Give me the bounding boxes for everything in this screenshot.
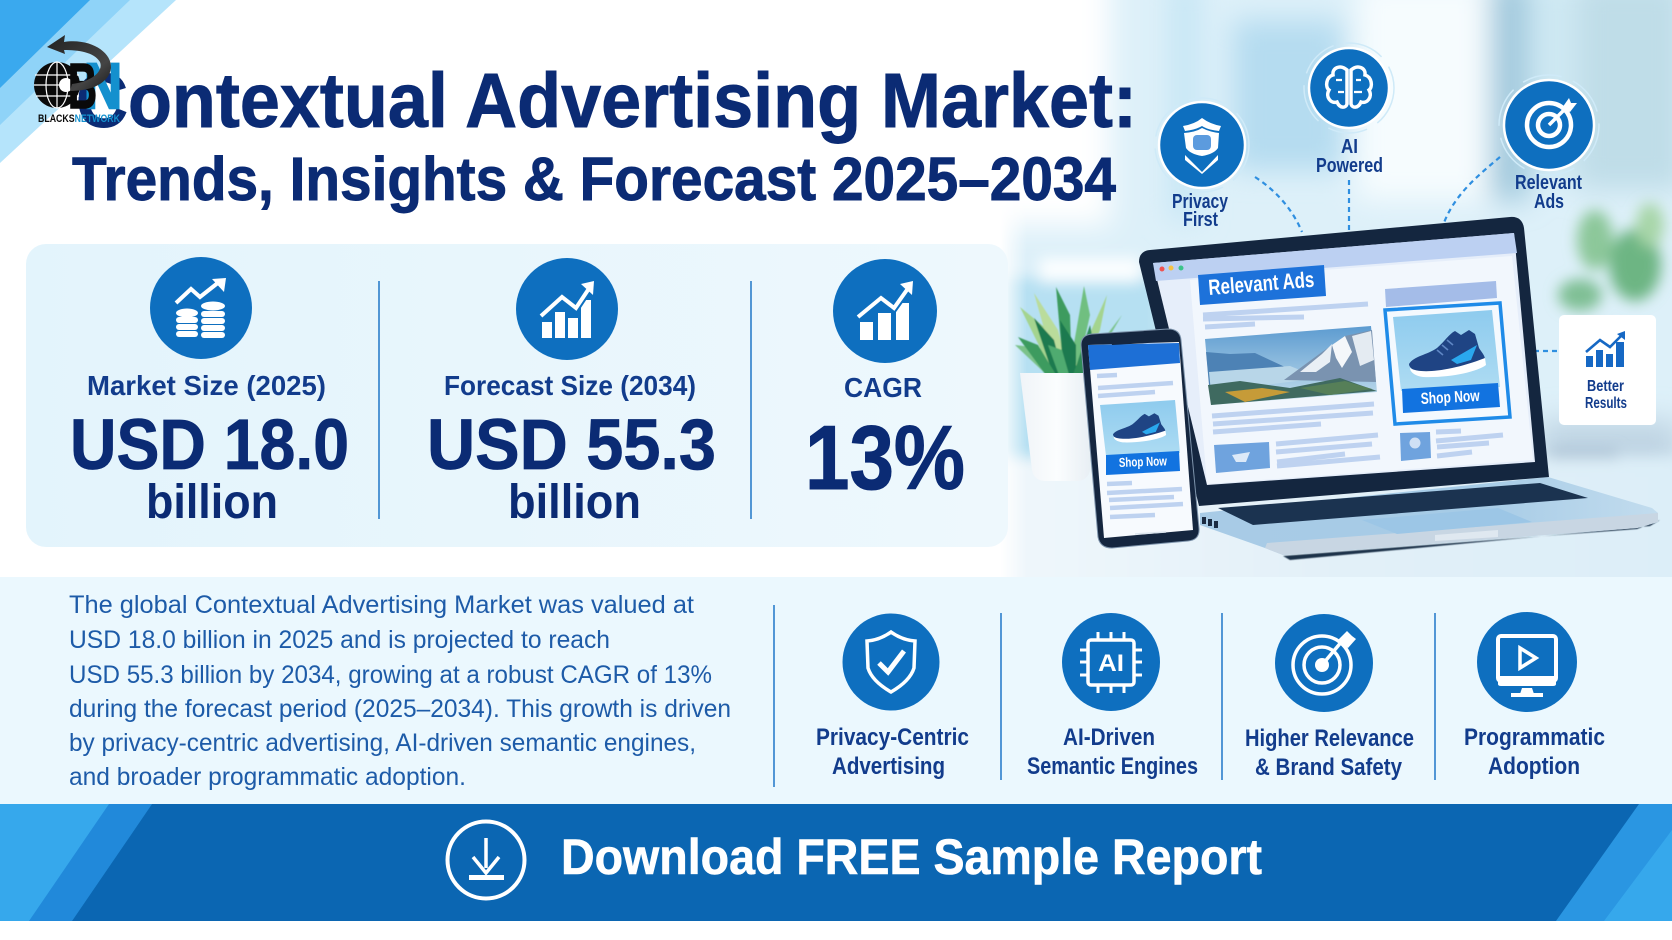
logo: Blacks Network: N: [84, 50, 122, 122]
driver: AI-driven semantic engines: AI: [1098, 650, 1124, 677]
description text: The global Contextual Advertising Market was valued at: [69, 591, 694, 619]
shoe: [1409, 330, 1486, 377]
driver: AI-driven semantic engines: Semantic Engines: [1027, 753, 1198, 780]
driver: privacy-centric advertising: Advertising: [832, 753, 945, 780]
driver: AI-driven semantic engines: AI-Driven: [1063, 724, 1155, 751]
description text: by privacy-centric advertising, AI-driven semantic engines,: [69, 729, 696, 757]
badge: AI powered: Powered: [1316, 155, 1383, 177]
banner text: Download FREE Sample Report: [561, 829, 1262, 885]
callout lines: [1255, 157, 1559, 351]
shoe ad: [1385, 303, 1510, 424]
description text: during the forecast period (2025–2034). This growth is driven: [69, 695, 731, 723]
logo: Blacks Network: BLACKSNETWORK: [38, 113, 120, 125]
illustration: phone: [1081, 329, 1199, 548]
panel: key statistics: [26, 244, 1008, 547]
driver: higher relevance and brand safety: Higher Relevance: [1245, 725, 1414, 752]
badge: relevant ads: [1499, 75, 1599, 213]
stat: market size 2025: Market Size (2025): [87, 370, 326, 401]
stat: market size 2025: billion: [146, 476, 278, 529]
image thumbnails: [1214, 432, 1431, 473]
driver: higher relevance and brand safety: & Brand Safety: [1255, 754, 1403, 781]
laptop base: [1200, 477, 1660, 560]
badge: relevant ads: Relevant: [1515, 172, 1582, 194]
driver: programmatic adoption: Programmatic: [1464, 724, 1605, 751]
banner: download sample report: [0, 804, 1672, 921]
logo: Blacks Network: [34, 35, 122, 125]
ad header bar: [1385, 281, 1497, 307]
badge: AI powered: AI: [1341, 136, 1358, 158]
card: better results: Better: [1587, 378, 1624, 395]
driver: privacy-centric advertising: Privacy-Centric: [816, 724, 969, 751]
stat: forecast size 2034: USD 55.3: [427, 406, 716, 485]
description text: USD 18.0 billion in 2025 and is projected to reach: [69, 626, 610, 654]
driver: privacy-centric advertising: [816, 614, 969, 780]
badge: AI powered: [1304, 43, 1394, 177]
shoe: [1113, 413, 1166, 442]
driver: AI-driven semantic engines: [1027, 613, 1198, 780]
icon: download: [448, 822, 524, 898]
stat: CAGR: CAGR: [844, 372, 922, 403]
description text: [69, 591, 731, 791]
title: Trends, Insights & Forecast 2025–2034: [72, 145, 1116, 213]
description text: and broader programmatic adoption.: [69, 763, 466, 791]
stat: CAGR: [805, 259, 965, 509]
corner decoration: [0, 0, 176, 163]
badge: privacy first: [1155, 98, 1249, 231]
stat: forecast size 2034: [427, 258, 716, 529]
shop now button: Shop Now: [1420, 388, 1481, 408]
stat: forecast size 2034: billion: [508, 476, 641, 529]
badge: privacy first: Privacy: [1172, 191, 1229, 213]
stat: CAGR: 13%: [805, 408, 965, 509]
card: better results: [1559, 315, 1656, 425]
stat: market size 2025: [70, 257, 349, 529]
badge: privacy first: First: [1183, 209, 1218, 231]
laptop screen: [1153, 233, 1535, 485]
mountain photo: [1205, 326, 1377, 405]
card: better results: Results: [1585, 395, 1627, 412]
logo: Blacks Network: B: [68, 50, 97, 122]
driver: programmatic adoption: [1464, 612, 1605, 780]
title: [72, 58, 1137, 213]
blurred office background: [960, 0, 1672, 598]
panel: lower summary: [0, 577, 1672, 804]
shop now button: [1106, 451, 1180, 475]
title: Contextual Advertising Market:: [76, 58, 1137, 144]
illustration: plant behind devices: [1015, 286, 1122, 481]
driver: programmatic adoption: Adoption: [1488, 753, 1580, 780]
illustration: laptop: [1139, 217, 1660, 560]
driver: higher relevance and brand safety: [1245, 614, 1414, 781]
shop now button: Shop Now: [1119, 453, 1168, 470]
laptop lid: [1139, 217, 1549, 506]
relevant ads banner: [1198, 265, 1326, 305]
stat: forecast size 2034: Forecast Size (2034): [444, 370, 696, 401]
badge: relevant ads: Ads: [1534, 191, 1564, 213]
stat: market size 2025: USD 18.0: [70, 406, 349, 485]
description text: USD 55.3 billion by 2034, growing at a robust CAGR of 13%: [69, 661, 712, 689]
relevant ads banner: Relevant Ads: [1207, 267, 1315, 300]
